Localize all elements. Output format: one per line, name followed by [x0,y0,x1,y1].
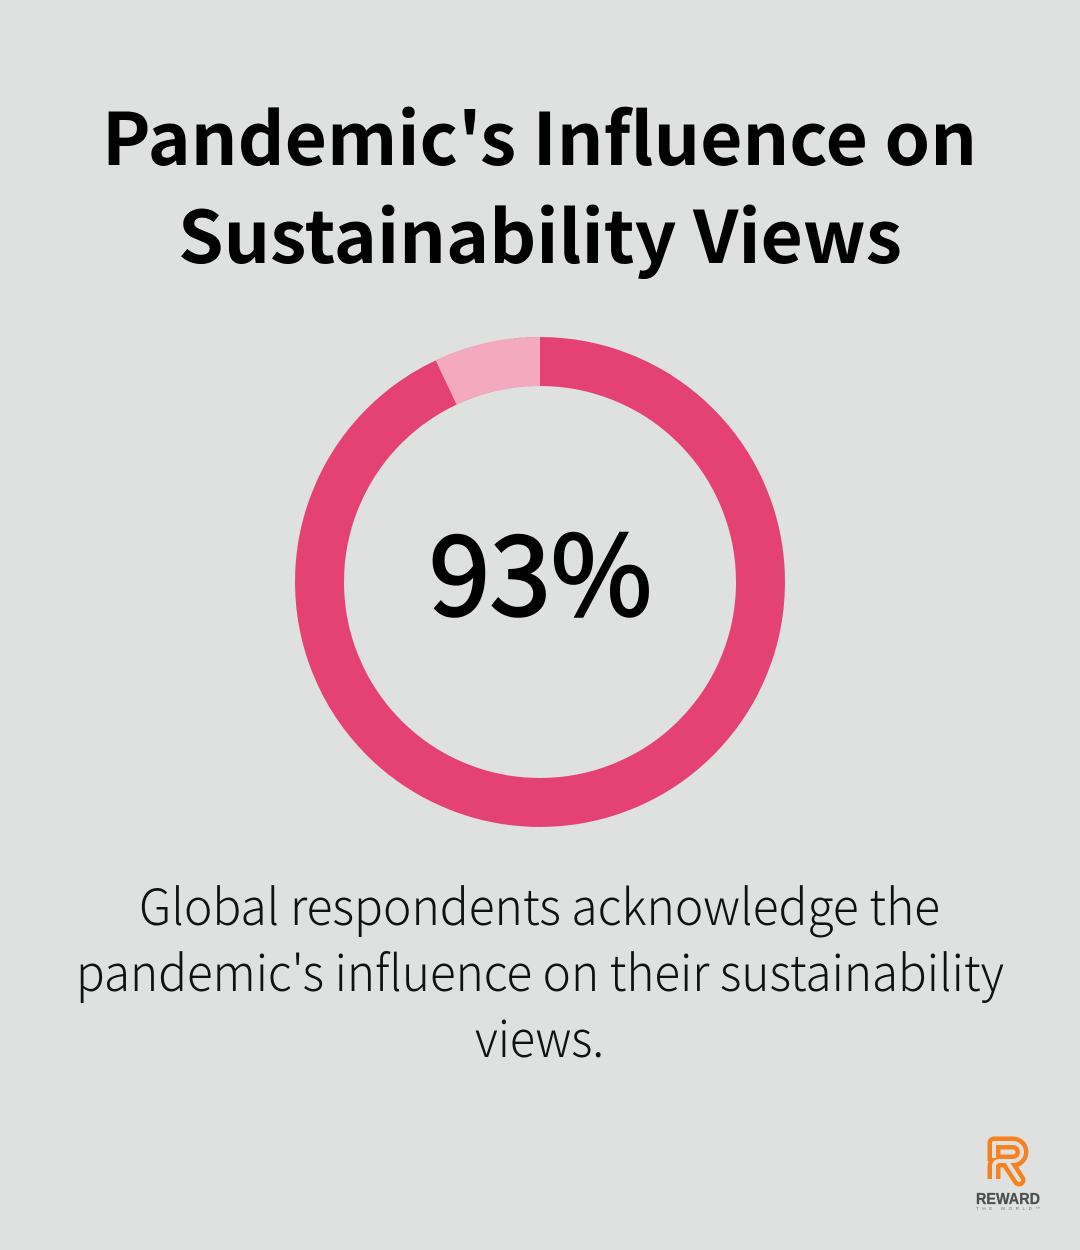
donut chart: 93% [320,362,760,802]
title: Pandemic's Influence on [102,81,977,186]
icon: orange R mark [994,1143,1022,1181]
title: Sustainability Views [178,179,902,284]
logo: Reward the World [976,1143,1040,1211]
description text: Global respondents acknowledge the [139,868,940,940]
description text: pandemic's influence on their sustainability [76,934,1004,1006]
logo tagline: THE WORLD™ [976,1206,1040,1211]
donut value: 93% [429,487,652,647]
description text: views. [475,1000,604,1072]
title [102,81,977,284]
description text [76,868,1004,1072]
logo wordmark: REWARD [976,1191,1040,1208]
